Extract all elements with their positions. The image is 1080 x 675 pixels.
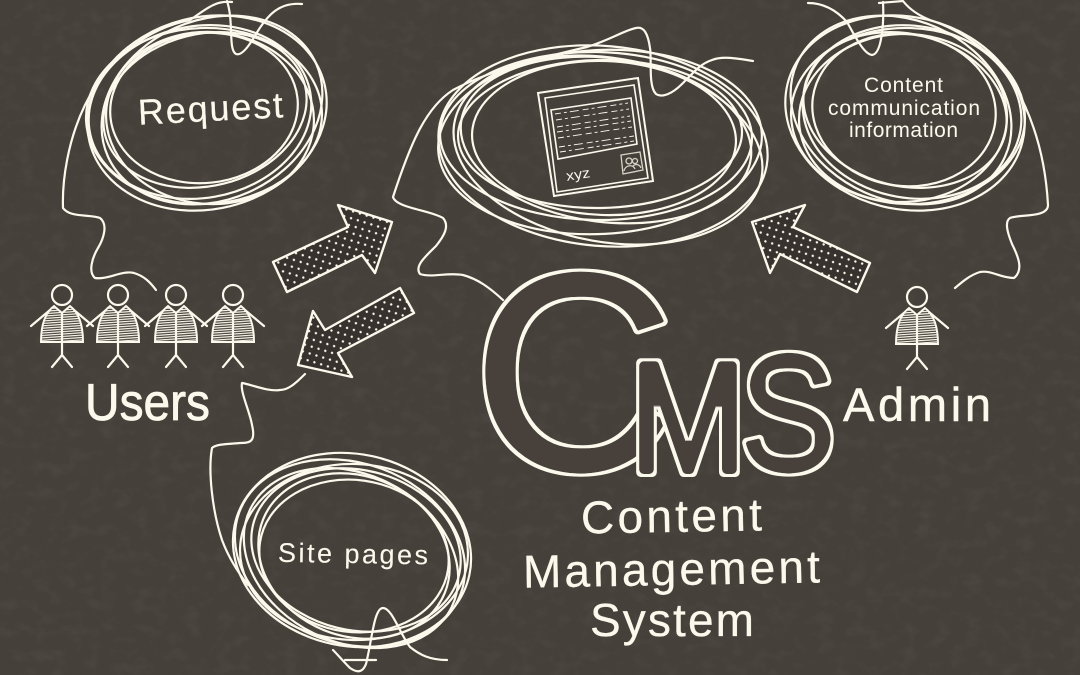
head: admin with content scribble bbox=[760, 0, 1048, 288]
head outline: users bbox=[63, 1, 302, 290]
document text lines bbox=[555, 103, 634, 152]
document image icon bbox=[621, 152, 643, 174]
head outline: site pages bbox=[210, 374, 447, 671]
label: content communication information bbox=[828, 74, 980, 142]
title: content management system: Management bbox=[522, 540, 821, 598]
scribble: content bbox=[760, 0, 1046, 239]
logo: CMS: S bbox=[740, 321, 836, 505]
scribble: document bbox=[430, 32, 778, 268]
document illustration bbox=[538, 78, 653, 196]
scribble: request bbox=[66, 0, 353, 239]
title: content management system bbox=[522, 488, 821, 646]
label: site pages: Site pages bbox=[278, 538, 428, 570]
head: cms with document scribble bbox=[393, 28, 778, 300]
label: content communication information: communication bbox=[828, 97, 980, 120]
label: content communication information: Content bbox=[864, 74, 943, 97]
logo: CMS: C bbox=[473, 217, 675, 529]
icon: admin bbox=[886, 287, 948, 369]
label: request: Request bbox=[137, 84, 284, 133]
arrow: users to cms bbox=[273, 205, 392, 292]
arrow: admin to cms bbox=[752, 205, 870, 292]
title: content management system: Content bbox=[580, 488, 763, 544]
head outline: cms bbox=[393, 28, 753, 300]
arrow: cms to users bbox=[298, 288, 414, 377]
label: content communication information: information bbox=[849, 119, 958, 142]
label: users: Users bbox=[85, 374, 210, 432]
label: admin: Admin bbox=[843, 378, 991, 431]
icons: four users bbox=[31, 285, 264, 367]
document label: xyz bbox=[565, 164, 591, 184]
head: site pages scribble bbox=[208, 374, 492, 675]
head outline: admin bbox=[808, 1, 1048, 288]
scribble: site pages bbox=[208, 428, 492, 675]
title: content management system: System bbox=[590, 594, 754, 646]
logo: CMS bbox=[473, 217, 836, 529]
logo: CMS: M bbox=[629, 330, 747, 506]
head: users with request scribble bbox=[63, 0, 353, 290]
